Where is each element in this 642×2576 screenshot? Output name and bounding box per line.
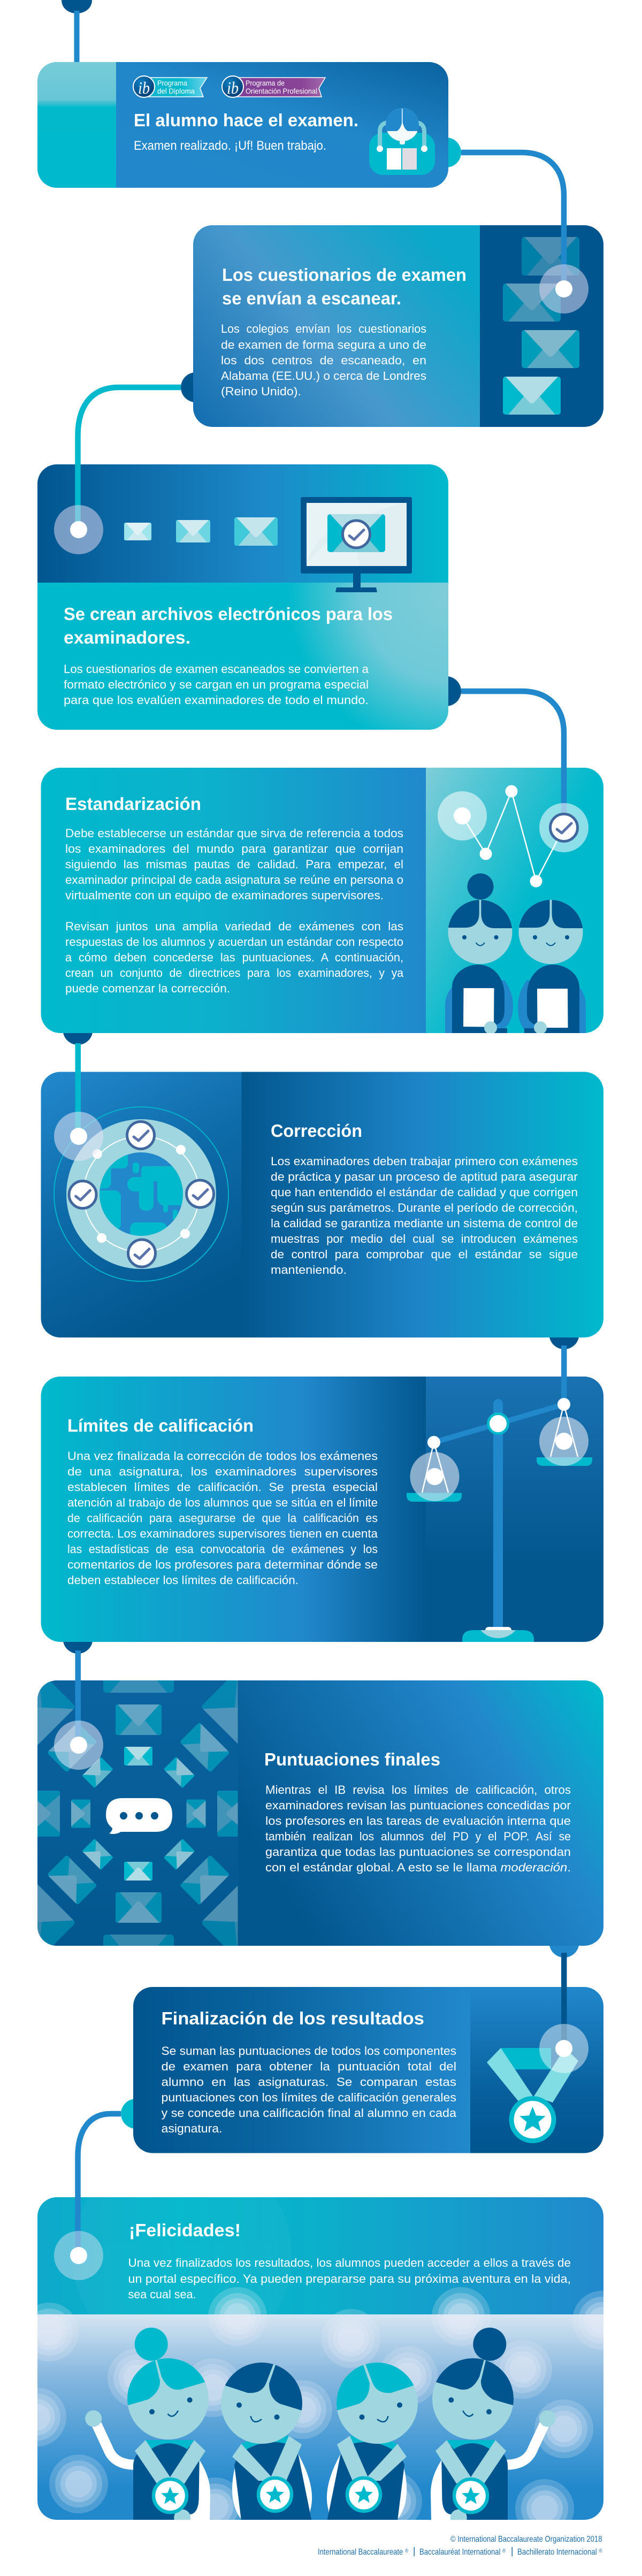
- badge: Programa de Orientación Profesional: [222, 76, 325, 97]
- figure: student 4: [430, 2328, 556, 2526]
- text: examen realizado: Examen realizado. ¡Uf! Buen trabajo.: [134, 139, 326, 153]
- text: archivos body: Los cuestionarios de examen escaneados se convierten a: [64, 662, 369, 676]
- knob: card 3 right: [431, 676, 461, 706]
- footer: copyright: ®: [405, 2548, 409, 2554]
- text: estandarización body: puede comenzar la corrección.: [65, 982, 230, 995]
- connector: card 1 to card 2: [461, 152, 564, 284]
- text: felicidades body: [128, 2256, 571, 2301]
- badge: Programa del Diploma: Programa: [157, 79, 187, 87]
- text: estandarización body: virtualmente con un equipo de examinadores supervisores.: [65, 889, 384, 902]
- text: estandarización body: a cómo deben concederse las puntuaciones. A continuación,: [65, 951, 403, 964]
- text: límites body: de una asignatura, los examinadores supervisores: [67, 1465, 378, 1478]
- text: felicidades body: sea cual sea.: [128, 2288, 196, 2301]
- icon: globe with check marks: [54, 1107, 228, 1281]
- footer: copyright: Bachillerato Internacional: [517, 2548, 614, 2557]
- text: estandarización body: examinador principal de cada asignatura se reúne en persona o: [65, 873, 403, 886]
- marker: card 2: [539, 264, 588, 314]
- text: estandarización body: Debe establecerse un estándar que sirva de referencia a todos: [65, 827, 403, 840]
- panel: estandarización: [41, 768, 603, 1034]
- connector: card 3 to card 4: [461, 691, 564, 816]
- text: cuestionarios body: (Reino Unido).: [221, 385, 301, 398]
- connector: card 6 to card 7: [75, 1650, 81, 1742]
- text: cuestionarios body: Alabama (EE.UU.) o cerca de Londres: [221, 369, 426, 383]
- marker: card 7: [54, 1721, 103, 1770]
- text: finalización body: [162, 2044, 457, 2135]
- text: corrección body: [271, 1155, 578, 1276]
- heading: corrección: Corrección: [271, 1121, 362, 1141]
- badge: Programa del Diploma: del Diploma: [157, 87, 195, 95]
- text: felicidades body: Una vez finalizados los resultados, los alumnos pueden acceder a ellos a través de: [128, 2256, 571, 2269]
- knob: card 4 bottom: [63, 1015, 93, 1045]
- text: corrección body: Los examinadores deben trabajar primero con exámenes: [271, 1155, 578, 1168]
- heading: archivos electrónicos: [64, 604, 393, 647]
- text: estandarización body: [65, 827, 404, 995]
- heading: finalización: Finalización de los resultados: [162, 2008, 424, 2028]
- badge: Programa de Orientación Profesional: Orientación Profesional: [246, 87, 317, 95]
- badge: Programa de Orientación Profesional: Programa de: [246, 79, 285, 87]
- text: finalización body: puntuaciones con los límites de calificación generales: [162, 2091, 456, 2104]
- panel: se crean archivos electrónicos: [37, 464, 448, 730]
- heading: puntuaciones finales: Puntuaciones finales: [264, 1749, 440, 1769]
- text: límites body: de calificación para asegurarse de que la calificación es: [67, 1511, 378, 1525]
- text: corrección body: manteniendo.: [271, 1263, 347, 1276]
- marker: card 3: [54, 505, 103, 554]
- panel: felicidades: [37, 2197, 603, 2520]
- text: corrección body: que han entendido el estándar de calidad y que corrigen: [271, 1186, 578, 1199]
- marker: card 9: [54, 2231, 103, 2280]
- text: cuestionarios body: los dos centros de escaneado, en: [221, 354, 426, 367]
- text: finalización body: alumno en las asignaturas. Se comparan estas: [162, 2075, 456, 2089]
- marker: card 8: [539, 2024, 588, 2073]
- heading: cuestionarios: se envían a escanear.: [222, 288, 401, 308]
- connector: card 2 to card 3: [78, 387, 181, 527]
- knob: card 8 left: [121, 2099, 151, 2129]
- connector: card 7 to card 8: [561, 1953, 567, 2046]
- text: puntuaciones body: examinadores revisan las puntuaciones concedidas por: [265, 1799, 571, 1812]
- text: archivos body: [64, 662, 369, 707]
- text: límites body: deben establecer los límites de calificación.: [67, 1573, 299, 1587]
- text: cuestionarios body: [221, 322, 426, 398]
- text: límites body: correcta. Los examinadores supervisores tienen en cuenta: [67, 1527, 378, 1540]
- text: finalización body: asignatura.: [162, 2122, 223, 2135]
- panel: los cuestionarios se envían a escanear: [193, 225, 603, 427]
- panel: puntuaciones finales: [37, 1680, 603, 1946]
- heading: cuestionarios: [222, 265, 467, 308]
- text: felicidades body: un portal específico. Ya pueden prepararse para su próxima aventura en la vida,: [128, 2272, 571, 2285]
- text: finalización body: de examen para obtener la puntuación total del: [162, 2060, 456, 2073]
- text: cuestionarios body: de examen de forma segura a uno de: [221, 338, 426, 351]
- panel: el alumno hace el examen: [37, 62, 448, 188]
- chart: line of points with check: [438, 785, 588, 887]
- pattern: envelopes: [0, 1646, 281, 1982]
- knob: card 2 left: [181, 372, 211, 402]
- text: estandarización body: respuestas de los alumnos y acuerdan un estándar con respecto: [65, 935, 403, 949]
- text: límites body: comentarios de los profesores para determinar dónde se: [67, 1558, 378, 1571]
- footer: copyright: © International Baccalaureate Organization 2018: [450, 2535, 602, 2544]
- footer: copyright: ®: [599, 2548, 602, 2554]
- icon: travelling envelopes: [124, 517, 278, 546]
- icon: examiner right: [515, 896, 587, 1034]
- text: puntuaciones body: garantiza que todas las puntuaciones se correspondan: [265, 1845, 571, 1859]
- heading: estandarización: Estandarización: [65, 794, 201, 814]
- text: archivos body: para que los evalúen examinadores de todo el mundo.: [64, 693, 369, 707]
- text: estandarización body: los examinadores del mundo para garantizar que corrijan: [65, 842, 403, 855]
- text: puntuaciones body: también realizan los alumnos del PD y el POP. Así se: [265, 1830, 571, 1843]
- connector: card 4 to card 5: [75, 1043, 81, 1134]
- icon: computer monitor: [301, 497, 412, 592]
- heading: archivos electrónicos: examinadores.: [64, 628, 190, 647]
- text: corrección body: de control para comprobar que el estándar se sigue: [271, 1248, 578, 1261]
- text: puntuaciones body: [265, 1783, 571, 1874]
- text: estandarización body: crean un conjunto de directrices para los examinadores, y ya: [65, 966, 404, 980]
- heading: límites: Límites de calificación: [67, 1416, 254, 1435]
- heading: archivos electrónicos: Se crean archivos electrónicos para los: [64, 604, 393, 624]
- knob: card 7 bottom: [549, 1928, 579, 1958]
- text: corrección body: según sus parámetros. Durante el período de corrección,: [271, 1201, 578, 1214]
- figure: student 1: [85, 2328, 211, 2526]
- footer: copyright: ®: [502, 2548, 506, 2554]
- text: límites body: [67, 1449, 378, 1587]
- connector: card 5 to card 6: [561, 1346, 567, 1404]
- panel: corrección: [41, 1072, 603, 1337]
- pattern: bokeh circles: [37, 2287, 603, 2520]
- text: puntuaciones body: los profesores en las tareas de evaluación interna que: [265, 1814, 571, 1828]
- heading: felicidades: ¡Felicidades!: [129, 2220, 241, 2240]
- text: estandarización body: Revisan juntos una amplia variedad de exámenes con las: [65, 920, 403, 933]
- footer: copyright: [318, 2535, 602, 2557]
- text: puntuaciones body: con el estándar global. A esto se le llama moderación .: [265, 1861, 571, 1874]
- icon: examiner left: [444, 873, 516, 1034]
- heading: cuestionarios: Los cuestionarios de examen: [222, 265, 467, 285]
- panel: límites de calificación: [41, 1377, 603, 1642]
- text: límites body: Una vez finalizada la corrección de todos los exámenes: [67, 1449, 378, 1463]
- text: límites body: atención al trabajo de los alumnos que se sitúa en el límite: [67, 1496, 378, 1509]
- knob: card 5 bottom: [549, 1319, 579, 1349]
- icon: balance scale: [407, 1398, 592, 1642]
- icon: envelopes: [503, 237, 579, 415]
- text: corrección body: la calidad se garantiza mediante un sistema de control de: [271, 1217, 578, 1230]
- badge: Programa de Orientación Profesional: ib: [227, 78, 239, 97]
- icon: student with book: [369, 108, 435, 175]
- connector: top cap and line: [62, 0, 92, 118]
- knob: card 1 right: [431, 137, 461, 167]
- text: finalización body: Se suman las puntuaciones de todos los componentes: [162, 2044, 456, 2058]
- text: límites body: establecen límites de calificación. Se presta especial: [67, 1480, 378, 1494]
- icon: medal: [487, 2048, 578, 2141]
- text: finalización body: y se concede una calificación final al alumno en cada: [162, 2106, 457, 2120]
- marker: card 5: [54, 1112, 103, 1161]
- text: estandarización body: siguiendo las mismas pautas de calidad. Para empezar, el: [65, 858, 403, 871]
- text: corrección body: de práctica y pasar un proceso de aptitud para asegurar: [271, 1170, 578, 1183]
- panel: finalización de los resultados: [133, 1987, 603, 2153]
- text: puntuaciones body: Mientras el IB revisa los límites de calificación, otros: [265, 1783, 571, 1797]
- text: corrección body: muestras por medio del cual se introducen exámenes: [271, 1232, 578, 1245]
- figure: student 2: [221, 2363, 312, 2520]
- footer: copyright: International Baccalaureate: [318, 2548, 422, 2557]
- figure: student 3: [326, 2363, 418, 2520]
- text: límites body: las estadísticas de esa convocatoria de exámenes y los: [67, 1542, 378, 1556]
- footer: copyright: Baccalauréat International: [419, 2548, 519, 2557]
- connector: card 8 to card 9: [78, 2114, 121, 2253]
- text: cuestionarios body: Los colegios envían los cuestionarios: [221, 322, 426, 335]
- badge: Programa del Diploma: ib: [138, 78, 150, 97]
- heading: el alumno hace el examen: El alumno hace el examen.: [134, 110, 358, 130]
- icon: chat bubble: [106, 1798, 172, 1834]
- badge: Programa del Diploma: [133, 76, 207, 97]
- text: archivos body: formato electrónico y se cargan en un programa especial: [64, 678, 369, 691]
- knob: card 6 bottom: [63, 1624, 93, 1654]
